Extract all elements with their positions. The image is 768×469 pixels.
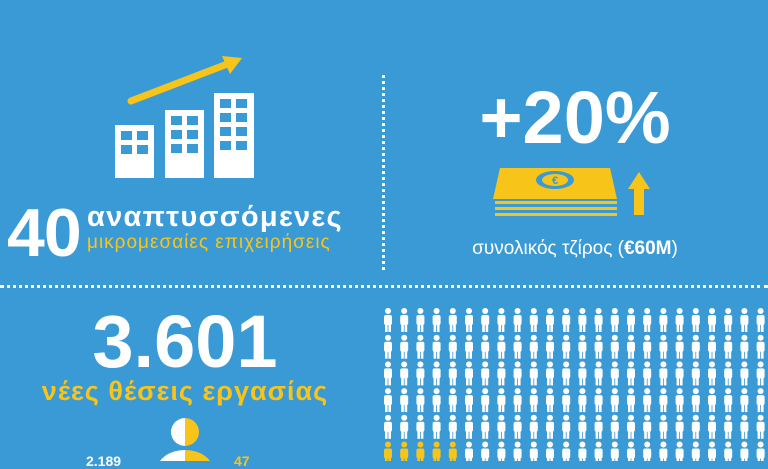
icon: buildings with growth arrow — [115, 56, 254, 178]
label right: 47 — [234, 453, 250, 469]
heading: businesses: αναπτυσσόμενες — [87, 201, 343, 233]
icon: money stack with arrow: € — [552, 175, 558, 187]
icon: money stack with arrow — [493, 168, 650, 216]
stat: 40: 40 — [7, 195, 81, 271]
stat: 3.601: 3.601 — [92, 300, 278, 383]
chart: people pictogram grid — [384, 308, 765, 461]
vertical dotted divider — [382, 75, 385, 270]
caption: turnover: συνολικός τζίρος (€60M) — [472, 238, 678, 259]
label left: 2.189 — [86, 453, 121, 469]
subtitle: businesses: μικρομεσαίες επιχειρήσεις — [87, 232, 331, 253]
stat: +20%: +20% — [479, 76, 671, 159]
horizontal dotted divider — [0, 285, 768, 288]
icon: person half yellow — [160, 418, 210, 461]
subtitle: new jobs: νέες θέσεις εργασίας — [42, 376, 328, 406]
